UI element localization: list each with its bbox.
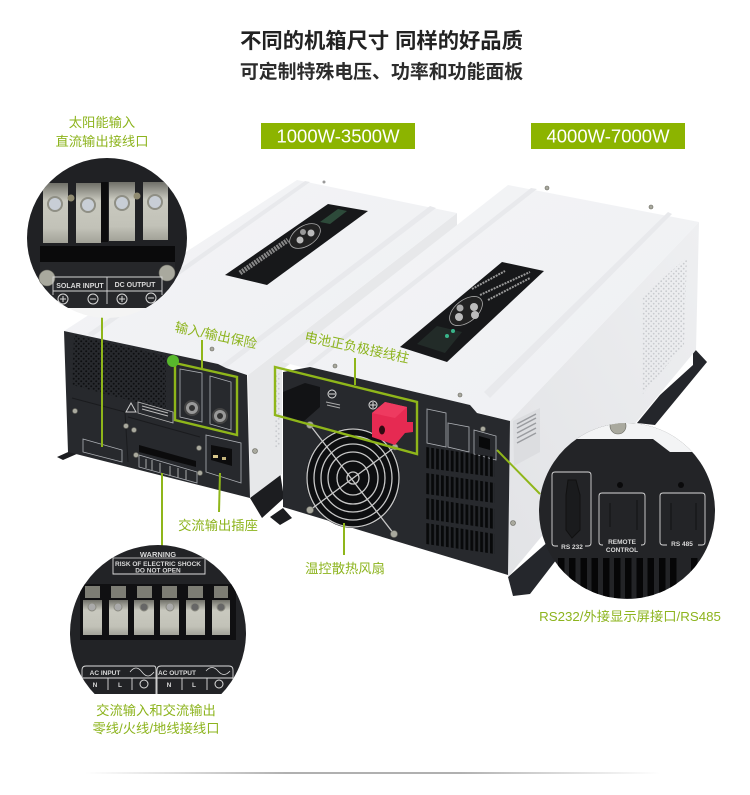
rear black panel bbox=[64, 331, 250, 498]
magnifier circle: DC OUTPUT bbox=[115, 282, 156, 289]
badge: 4000W-7000W bbox=[531, 123, 685, 149]
AC input and output labels: N bbox=[167, 682, 172, 689]
callout: battery terminal highlight bbox=[275, 328, 417, 454]
badge: 1000W-3500W: 1000W-3500W bbox=[276, 126, 400, 146]
title: 不同的机箱尺寸 同样的好品质 bbox=[240, 29, 523, 53]
vents bbox=[558, 558, 698, 598]
label: fan: 温控散热风扇 bbox=[305, 561, 385, 576]
label: solar input: 太阳能输入 bbox=[69, 115, 135, 130]
side face bbox=[508, 222, 699, 577]
battery negative block bbox=[283, 383, 377, 422]
cooling fan bbox=[306, 422, 400, 538]
warning box bbox=[113, 550, 205, 574]
RS 232 port bbox=[552, 472, 591, 551]
remote control port: CONTROL bbox=[606, 547, 638, 554]
inverter: large 4000W-7000W unit bbox=[270, 185, 707, 596]
badge: 1000W-3500W bbox=[261, 123, 415, 149]
DC terminal label bbox=[83, 439, 122, 462]
AC input and output labels: AC OUTPUT bbox=[158, 670, 196, 677]
RS 485 port bbox=[660, 493, 705, 548]
magnifier circle bbox=[27, 158, 187, 318]
label: communication ports: RS232/外接显示屏接口/RS485 bbox=[539, 608, 721, 624]
warning box: RISK OF ELECTRIC SHOCK bbox=[115, 561, 201, 568]
side face bbox=[248, 213, 457, 498]
leader line bbox=[497, 450, 540, 494]
leader line bbox=[101, 306, 103, 447]
magnifier circle: SOLAR INPUT bbox=[56, 283, 104, 290]
AC output socket bbox=[206, 435, 241, 483]
inverter: small 1000W-3500W unit bbox=[57, 180, 457, 518]
subtitle: 可定制特殊电压、功率和功能面板 bbox=[240, 60, 523, 83]
label: AC socket: 交流输出插座 bbox=[178, 517, 258, 533]
AC input and output labels: N bbox=[93, 682, 98, 689]
label: neutral live earth: 零线/火线/地线接线口 bbox=[92, 720, 220, 736]
fuse holders bbox=[180, 369, 231, 430]
remote control port: REMOTE bbox=[608, 539, 637, 546]
label: AC input and output: 交流输入和交流输出 bbox=[96, 702, 216, 718]
communication ports bbox=[427, 409, 516, 526]
top face bbox=[282, 185, 699, 421]
AC input and output labels: AC INPUT bbox=[90, 670, 120, 677]
label: DC output: 直流输出接线口 bbox=[55, 133, 149, 149]
callout: AC input / output connector bbox=[70, 473, 246, 734]
remote control port bbox=[599, 493, 645, 554]
red positive terminal bbox=[372, 402, 413, 445]
panel screws bbox=[72, 347, 258, 476]
RS 232 port: RS 232 bbox=[561, 544, 583, 551]
ventilation slats bbox=[426, 447, 495, 554]
mounting brackets bbox=[637, 347, 707, 425]
callout: fuse highlight bbox=[167, 319, 258, 435]
bottom shadow line bbox=[85, 772, 660, 774]
top face bbox=[64, 180, 457, 375]
AC terminal label and slot bbox=[139, 445, 197, 483]
callout: solar input / DC output connector bbox=[27, 115, 187, 447]
magnifier circle bbox=[539, 423, 715, 599]
mounting brackets bbox=[57, 448, 284, 518]
top control panel bbox=[400, 262, 544, 362]
leader line bbox=[161, 473, 163, 546]
top control panel bbox=[225, 204, 368, 285]
label: fuses: 输入/输出保险 bbox=[174, 319, 258, 352]
badge: 4000W-7000W: 4000W-7000W bbox=[546, 126, 670, 146]
AC input and output labels bbox=[82, 666, 233, 694]
AC input and output labels: L bbox=[192, 682, 196, 689]
AC input and output labels: L bbox=[118, 682, 122, 689]
callout: communication ports bbox=[497, 418, 730, 624]
front black panel bbox=[283, 367, 510, 575]
callout: cooling fan bbox=[305, 523, 385, 576]
warning label bbox=[126, 402, 173, 423]
magnifier circle bbox=[70, 545, 246, 694]
label: battery terminals: 电池正负极接线柱 bbox=[303, 328, 411, 366]
callout: AC output socket bbox=[178, 473, 258, 533]
warning box: DO NOT OPEN bbox=[135, 568, 181, 574]
warning box: WARNING bbox=[140, 550, 176, 559]
RS 485 port: RS 485 bbox=[671, 541, 693, 548]
